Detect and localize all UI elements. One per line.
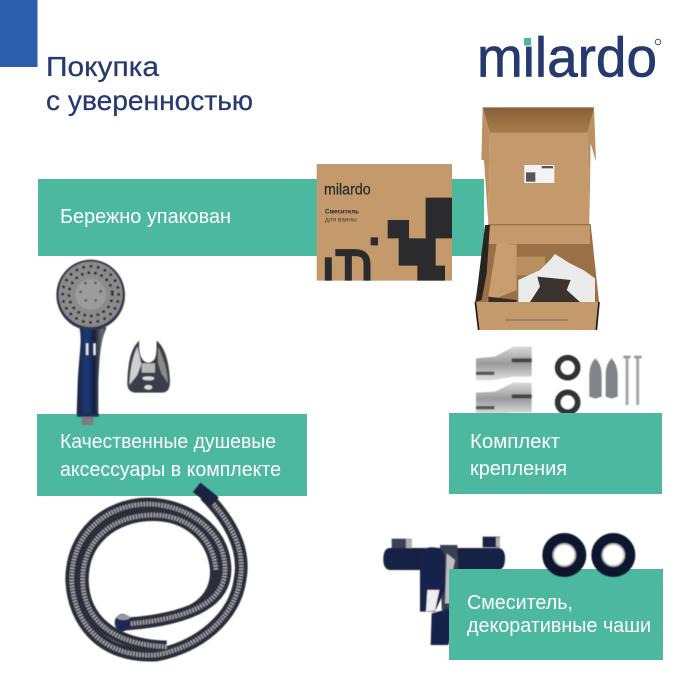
panel: shower accessories: Качественные душевые xyxy=(60,431,276,453)
panel: mounting kit: Комплект xyxy=(470,431,560,453)
panel: mixer and decorative cups: Смеситель, xyxy=(467,592,573,614)
closed kraft box: milardo xyxy=(324,182,371,199)
corner accent xyxy=(0,0,38,67)
mixer faucet xyxy=(383,537,505,645)
panel: mixer and decorative cups: декоративные чаши xyxy=(467,615,651,637)
panel: carefully packed: Бережно упакован xyxy=(60,206,231,228)
hand shower xyxy=(56,260,125,415)
mounting hardware xyxy=(476,347,642,415)
panel: shower accessories: аксессуары в комплекте xyxy=(60,459,281,481)
title: с уверенностью xyxy=(46,85,253,116)
closed kraft box xyxy=(317,164,452,281)
title xyxy=(46,51,253,116)
closed kraft box: для ванны xyxy=(325,217,357,224)
closed kraft box: Смеситель xyxy=(325,208,359,215)
panel: carefully packed xyxy=(38,179,484,256)
panel: mounting kit: крепления xyxy=(470,458,567,480)
panel: shower accessories xyxy=(37,414,307,496)
panel: mixer and decorative cups xyxy=(449,569,663,660)
shower hose xyxy=(72,487,241,655)
hand shower connector overlapping panel xyxy=(77,413,99,425)
open kraft box xyxy=(475,107,599,330)
title: Покупка xyxy=(46,51,160,82)
decorative cups xyxy=(548,539,630,571)
shower holder xyxy=(127,341,170,393)
panel: mounting kit xyxy=(449,413,662,494)
logo: milardo: milardo xyxy=(477,26,657,88)
